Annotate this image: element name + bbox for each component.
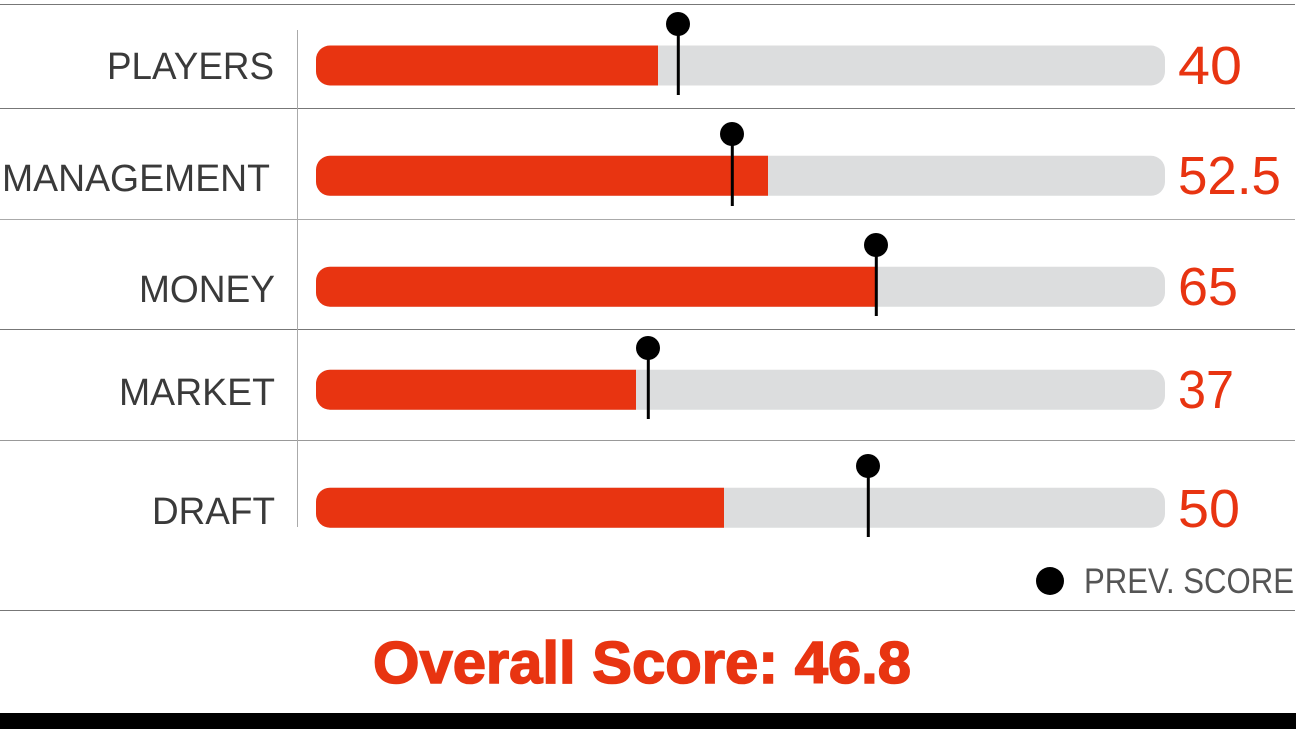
value: management: 52.5 (1178, 146, 1281, 206)
bar: management 52.5 (316, 156, 1165, 196)
bar: players 40 (316, 46, 1165, 86)
bar: market 37 (316, 370, 1165, 410)
label: management: MANAGEMENT (2, 158, 270, 200)
value: draft: 50 (1178, 479, 1240, 539)
value: market: 37 (1178, 360, 1234, 420)
row: players (107, 12, 1242, 96)
marker: money previous score (864, 233, 888, 316)
marker: players previous score (666, 12, 690, 95)
label: money: MONEY (139, 269, 275, 311)
overall score: Overall Score: 46.8 (373, 630, 911, 696)
value: money: 65 (1178, 257, 1238, 317)
bar: money 65 (316, 267, 1165, 307)
row: money (139, 233, 1238, 317)
row: management (2, 122, 1281, 206)
label: draft: DRAFT (152, 491, 275, 533)
bar: draft 50 (316, 488, 1165, 528)
row: draft (152, 454, 1240, 539)
bottom black band (0, 713, 1296, 729)
marker: management previous score (720, 122, 744, 206)
label: market: MARKET (119, 372, 275, 414)
row: market (119, 336, 1234, 420)
marker: draft previous score (856, 454, 880, 537)
label: players: PLAYERS (107, 46, 274, 88)
value: players: 40 (1178, 36, 1242, 96)
marker: market previous score (636, 336, 660, 419)
